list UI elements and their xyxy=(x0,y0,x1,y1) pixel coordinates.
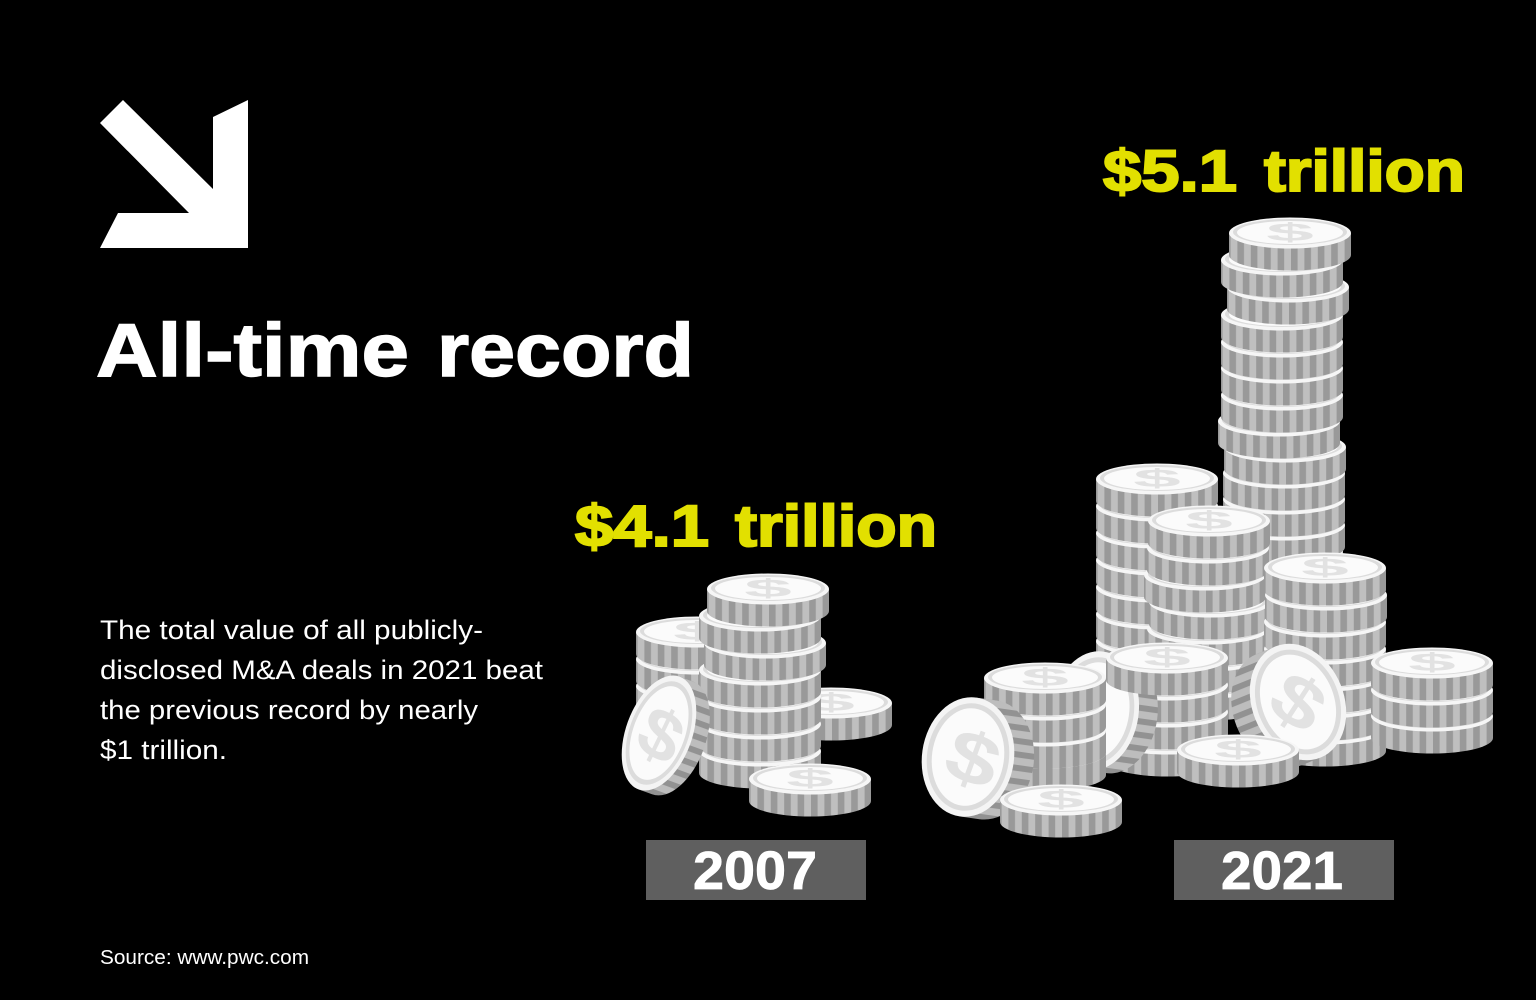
year label: 2021: 2021 xyxy=(1221,841,1343,901)
body text: $1 trillion. xyxy=(100,735,227,765)
body text: the previous record by nearly xyxy=(100,695,479,725)
value label: 2007: trillion xyxy=(735,494,937,559)
coin pile: 2021 xyxy=(914,218,1493,837)
value label: 2021 xyxy=(1103,139,1465,204)
title xyxy=(96,308,694,392)
coin pile: 2007 xyxy=(607,574,892,816)
value label: 2021: $5.1 xyxy=(1103,139,1237,204)
year label: 2021 xyxy=(1174,840,1394,901)
coin pile: 2007: $ xyxy=(626,690,696,781)
body text xyxy=(100,615,544,765)
title: All-time xyxy=(96,308,409,392)
year label: 2007 xyxy=(646,840,866,901)
body text: The total value of all publicly- xyxy=(100,615,483,645)
coin pile: 2021: $ xyxy=(1255,656,1340,749)
icon: down-right arrow xyxy=(100,100,248,248)
value label: 2007 xyxy=(575,494,937,559)
year label: 2007: 2007 xyxy=(693,841,817,901)
body text: disclosed M&A deals in 2021 beat xyxy=(100,655,544,685)
source note: Source: www.pwc.com xyxy=(100,947,309,969)
title: record xyxy=(437,308,694,392)
coin pile: 2021: $ xyxy=(935,711,1011,805)
value label: 2021: trillion xyxy=(1264,139,1465,204)
value label: 2007: $4.1 xyxy=(575,494,709,559)
